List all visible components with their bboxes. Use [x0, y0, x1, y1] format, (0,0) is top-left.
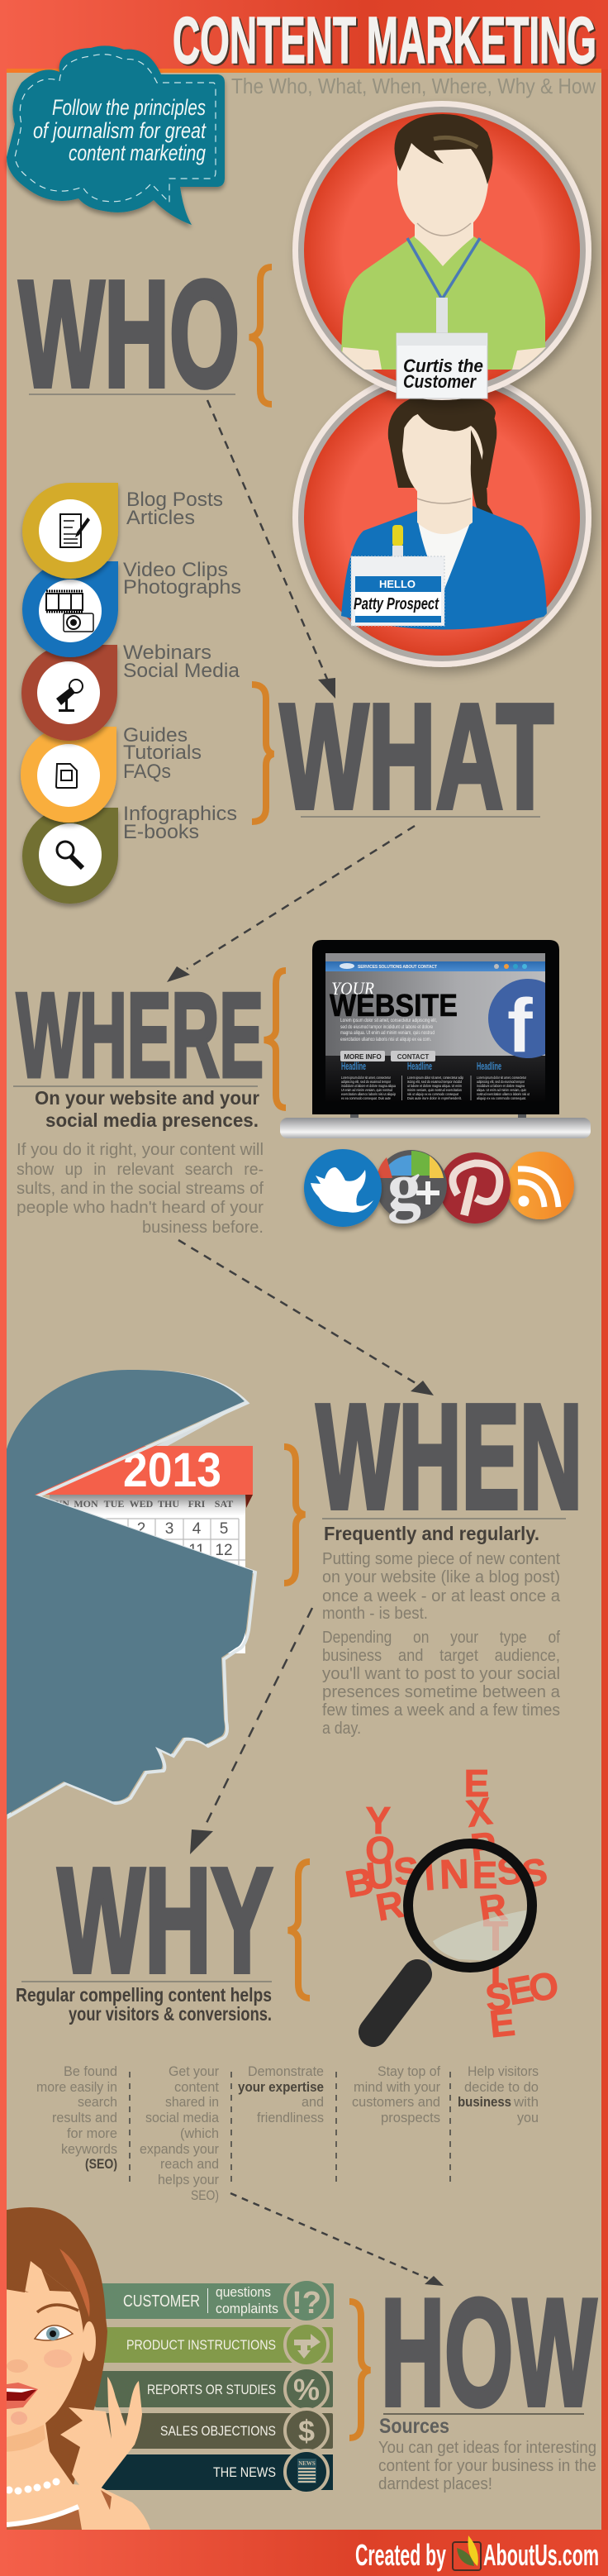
word: business: I	[423, 1855, 436, 1898]
word: business	[342, 1849, 550, 1906]
where body text: If you do it right, your content will	[17, 1141, 264, 1159]
where body text: sults, and in the social streams of	[17, 1180, 264, 1198]
footer band	[0, 2530, 608, 2576]
when body text: you'll want to post to your social	[322, 1665, 560, 1683]
calendar weekdays: FRI	[188, 1498, 206, 1510]
portrait: Curtis the Customer	[292, 101, 591, 400]
heading: WHERE: WHERE	[17, 968, 264, 1102]
when body text: Depending on your type of	[322, 1629, 560, 1647]
why subheading: your visitors & conversions.	[69, 2003, 272, 2025]
screen: website mockup: ut labore et dolore magna aliqua. Ut enim	[407, 1084, 462, 1088]
screen: website mockup: aliqua. Ut enim ad minim veniam, quis	[477, 1088, 527, 1092]
bar: the news: THE NEWS	[213, 2464, 276, 2480]
icon: newspaper: NEWS	[298, 2460, 316, 2467]
when body text: presences sometime between a	[322, 1683, 561, 1701]
screen: website mockup: Headline	[477, 1060, 501, 1072]
how body text: darndest places!	[378, 2475, 492, 2493]
list item: blog posts articles	[22, 483, 118, 579]
chest	[0, 2422, 150, 2530]
list labels: E-books	[123, 821, 199, 843]
where subheading	[35, 1087, 259, 1131]
column: be found: Be found	[64, 2063, 117, 2079]
footer credit: Created by	[355, 2538, 446, 2572]
hair highlight	[59, 2249, 90, 2317]
where subheading: social media presences.	[45, 1109, 259, 1131]
calendar year: 2013	[123, 1443, 221, 1497]
screen: website mockup: exercitation ullamco laboris nisi ut aliquip	[341, 1092, 396, 1096]
column: top of mind: prospects	[381, 2110, 440, 2125]
column: be found: keywords	[61, 2141, 117, 2157]
footer credit	[355, 2535, 599, 2572]
icon: magnifier	[57, 842, 83, 868]
why subheading: Regular compelling content helps	[16, 1984, 272, 2006]
right border	[601, 0, 608, 2576]
eye	[35, 2326, 73, 2340]
calendar	[35, 1399, 253, 1653]
column: social: reach and	[160, 2156, 219, 2172]
list labels: Blog Posts	[126, 489, 223, 511]
head silhouette	[7, 1370, 255, 1816]
where subheading: On your website and your	[35, 1087, 259, 1109]
why subheading	[16, 1984, 272, 2025]
word: expertise	[463, 1762, 517, 2045]
brace: WHAT	[252, 685, 273, 822]
word: your: Y	[366, 1799, 391, 1842]
mouth	[7, 2383, 38, 2409]
word: expertise: X	[463, 1789, 495, 1835]
bar: customer: complaints	[216, 2301, 278, 2316]
why columns	[36, 2063, 539, 2203]
laptop	[280, 940, 591, 1138]
hair	[0, 2207, 107, 2488]
when body text: on your website (like a blog post)	[322, 1568, 560, 1586]
speech bubble callout	[7, 45, 225, 225]
heading: WHO: WHO	[19, 249, 240, 418]
column: top of mind: Stay top of	[378, 2063, 440, 2079]
column: be found: search	[78, 2094, 117, 2110]
calendar weekdays: MON	[74, 1498, 98, 1510]
portrait: Patty Prospect	[292, 368, 591, 667]
word: expertise: E	[464, 1762, 489, 1805]
list labels: Video Clips	[123, 559, 228, 581]
column: do business: business	[458, 2094, 511, 2110]
column: do business: with	[513, 2094, 539, 2110]
calendar dates: 11	[188, 1542, 205, 1559]
calendar weekdays: SAT	[215, 1498, 233, 1510]
arrow: when to why	[190, 1608, 312, 1854]
calendar dates: 2	[137, 1520, 145, 1538]
hand	[60, 2377, 142, 2494]
icon: facebook: f	[507, 984, 533, 1068]
word: business: B	[342, 1859, 377, 1906]
screen: website mockup: sed do eiusmod tempor incididunt ut labore et dolore	[340, 1025, 434, 1030]
icon: direction arrows	[294, 2334, 321, 2359]
brace: HOW	[349, 2302, 370, 2438]
list labels: Tutorials	[123, 742, 202, 764]
list item: video clips photographs	[22, 561, 118, 657]
laptop base	[280, 1118, 591, 1138]
word: business: U	[364, 1852, 396, 1898]
word: expertise: T	[483, 1913, 508, 1959]
column: be found: results and	[52, 2110, 117, 2125]
word cloud under magnifier	[342, 1762, 562, 2045]
list item: webinars social media	[21, 645, 117, 741]
bar: customer: questions	[216, 2284, 271, 2300]
arrow: what to where	[167, 826, 415, 982]
word: business: S	[392, 1849, 421, 1893]
social icons	[304, 1148, 574, 1227]
icon: google plus: g	[387, 1148, 421, 1224]
screen: website mockup: MORE INFO	[344, 1053, 382, 1061]
heading: WHY: WHY	[58, 1838, 273, 2004]
column: be found: more easily in	[36, 2079, 117, 2095]
calendar weekdays: TUE	[104, 1498, 124, 1510]
where body text: business before.	[142, 1219, 264, 1237]
name badge: Patty Prospect: Patty Prospect	[354, 595, 439, 613]
column: expertise: and	[302, 2094, 324, 2110]
list labels: Social Media	[123, 660, 240, 682]
screen: website mockup: incididunt ut labore et dolore magna	[477, 1084, 525, 1088]
screen: website mockup: Lorem ipsum dolor sit amet, consectetur adipiscing elit,	[340, 1018, 437, 1023]
bubble text: of journalism for great	[33, 118, 207, 143]
word: your: O	[365, 1829, 395, 1872]
brace: WHY	[288, 1862, 310, 1998]
icon: facebook	[488, 979, 545, 1058]
screen: website mockup: nostrud exercitation ullamco laboris nisi ut	[477, 1092, 530, 1096]
column: be found: (SEO)	[85, 2156, 117, 2172]
how subheading: Sources	[379, 2415, 449, 2438]
icon: document and pen	[60, 514, 90, 547]
screen: website mockup: aliquip ex ea commodo consequat.	[477, 1096, 526, 1100]
column: social	[140, 2063, 220, 2203]
column: social: Get your	[169, 2063, 219, 2079]
list labels: Articles	[126, 507, 195, 529]
when subheading: Frequently and regularly.	[324, 1523, 539, 1544]
bar: product instructions	[99, 2323, 333, 2366]
screen: website mockup: adipiscing elit, sed do eiusmod tempor	[477, 1080, 525, 1084]
bar: product instructions: PRODUCT INSTRUCTIONS	[126, 2337, 276, 2353]
where body text: show up in relevant search re-	[17, 1161, 264, 1179]
word: business: N	[439, 1850, 470, 1898]
screen: website mockup	[325, 953, 545, 1100]
column: top of mind: customers and	[352, 2094, 440, 2110]
column: expertise: Demonstrate	[248, 2063, 324, 2079]
when body text: month - is best.	[322, 1605, 428, 1623]
name badge: Curtis: Customer	[403, 371, 477, 392]
column: be found: for more	[67, 2125, 117, 2141]
word: your: R	[373, 1882, 407, 1929]
screen: website mockup: adipiscing elit, sed do eiusmod tempor	[341, 1080, 391, 1084]
screen: website mockup: Headline	[341, 1060, 366, 1072]
when body text: a day.	[322, 1720, 361, 1738]
column: do business: Help visitors	[468, 2063, 539, 2079]
how body text	[378, 2439, 596, 2493]
source bars	[95, 2279, 334, 2493]
necklace	[5, 2478, 78, 2525]
calendar dates	[137, 1520, 233, 1559]
calendar dates: 4	[192, 1520, 202, 1538]
arrow: why to how	[230, 2193, 444, 2286]
screen: website mockup: magna aliqua. Ut enim ad minim veniam, quis nostrud	[340, 1031, 435, 1036]
screen: website mockup: CONTACT	[397, 1053, 429, 1061]
calendar dates: 3	[165, 1520, 173, 1538]
magnifying glass	[373, 1844, 532, 2032]
how body text: You can get ideas for interesting	[378, 2439, 596, 2457]
when body text: once a week - or at least once a	[322, 1587, 561, 1605]
column: expertise	[238, 2063, 324, 2125]
screen: website mockup: exercitation ullamco laboris nisi ut aliquip ex ea com.	[340, 1038, 431, 1042]
when body text: business and target audience,	[322, 1647, 560, 1665]
word: business: S	[519, 1849, 550, 1896]
bubble text	[33, 95, 207, 165]
screen: website mockup: minim veniam, quis nostrud exercitation	[407, 1088, 462, 1092]
word: seo: E	[504, 1967, 537, 2013]
calendar weekdays: THU	[158, 1498, 179, 1510]
brace: WHERE	[264, 971, 286, 1108]
icon: aboutus logo	[453, 2535, 481, 2570]
word: business: E	[473, 1853, 497, 1896]
icon: microphone	[56, 680, 83, 712]
face	[7, 2261, 84, 2423]
screen: website mockup: incididunt ut labore et dolore magna aliqua	[341, 1084, 396, 1088]
bar: the news	[100, 2450, 333, 2493]
icon: rss	[506, 1152, 574, 1219]
icon: newspaper	[297, 2459, 316, 2483]
column: social: social media	[145, 2110, 220, 2125]
word: expertise: S	[483, 1974, 513, 2019]
column: expertise: friendliness	[257, 2110, 324, 2125]
screen: website mockup: iscing elit, sed do eiusmod tempor incidid	[407, 1080, 462, 1084]
screen: website mockup: Lorem ipsum dolor sit amet, consectetur adip	[407, 1076, 463, 1080]
list labels	[123, 489, 241, 843]
column: social: (which	[180, 2125, 219, 2141]
screen: website mockup: WEBSITE	[330, 989, 458, 1023]
when body text	[322, 1550, 561, 1738]
name badge: Curtis: Curtis the	[403, 355, 483, 376]
ear	[83, 2321, 96, 2361]
column: do business	[458, 2063, 539, 2125]
bar: customer	[99, 2279, 334, 2322]
how body text: content for your business in the	[378, 2457, 596, 2475]
where body text	[17, 1141, 264, 1237]
calendar dates: 5	[220, 1520, 228, 1538]
calendar dates: 12	[215, 1542, 233, 1559]
screen: website mockup: Lorem ipsum dolor sit amet, consectetur	[341, 1076, 391, 1080]
arrow: where to when	[178, 1240, 434, 1395]
screen: website mockup: Lorem ipsum dolor sit amet, consectetur	[477, 1076, 526, 1080]
list labels: FAQs	[123, 761, 171, 783]
icon: google plus	[376, 1148, 447, 1224]
icon: twitter	[304, 1149, 382, 1227]
word: seo: O	[525, 1963, 562, 2011]
bar: sales objections	[95, 2409, 333, 2452]
word: expertise: P	[468, 1824, 498, 1868]
icon: film and camera	[46, 591, 93, 632]
column: expertise: your expertise	[238, 2079, 324, 2095]
word: seo	[504, 1963, 562, 2013]
bar: sales objections: SALES OBJECTIONS	[160, 2423, 276, 2439]
column: top of mind	[352, 2063, 440, 2125]
name badge: Patty Prospect: HELLO	[379, 578, 416, 590]
bar: reports or studies: REPORTS OR STUDIES	[147, 2382, 276, 2397]
word: business: S	[495, 1849, 525, 1893]
column: social: helps your	[158, 2172, 219, 2187]
bar: reports or studies	[95, 2368, 333, 2411]
name badge: Patty Prospect	[351, 556, 444, 626]
calendar weekdays: WED	[130, 1498, 154, 1510]
left border	[0, 0, 7, 2576]
nose	[7, 2359, 28, 2373]
eyebrow	[37, 2305, 78, 2312]
word: expertise: E	[487, 2001, 517, 2045]
screen: website mockup: Headline	[407, 1060, 432, 1072]
screen: website mockup: YOUR	[331, 978, 375, 999]
column: do business: you	[517, 2110, 539, 2125]
column: social: shared in	[165, 2094, 219, 2110]
when body text: few times a week and a few times	[322, 1701, 560, 1720]
arrow: who to what	[207, 400, 335, 699]
icon: exclamation question: !?	[292, 2286, 321, 2321]
brace: WHEN	[284, 1447, 305, 1583]
icon: pinterest	[439, 1152, 511, 1224]
column: social: expands your	[140, 2141, 219, 2157]
bubble text: Follow the principles	[52, 95, 206, 120]
name badge: Curtis	[397, 333, 487, 398]
word: your	[365, 1799, 407, 1929]
woman illustration	[0, 2207, 150, 2530]
column: social: content	[174, 2079, 219, 2095]
bubble text: content marketing	[69, 141, 206, 165]
list labels: Photographs	[123, 576, 241, 599]
bar: customer: CUSTOMER	[123, 2292, 200, 2311]
list labels: Infographics	[123, 803, 237, 825]
screen: website mockup: Ut enim ad minim veniam, quis nostrud	[341, 1088, 392, 1092]
word: expertise: I	[491, 1952, 501, 1995]
when body text: Putting some piece of new content	[322, 1550, 560, 1568]
calendar weekdays: SUN	[50, 1498, 69, 1510]
screen: website mockup: Duis aute irure dolor in reprehenderit.	[407, 1096, 462, 1100]
list labels: Guides	[123, 724, 188, 747]
brace: WHO	[249, 267, 272, 404]
word: expertise: R	[477, 1885, 510, 1931]
where body text: people who hadn't heard of your	[17, 1199, 264, 1217]
calendar weekdays	[50, 1498, 233, 1510]
column: social: SEO)	[191, 2187, 219, 2203]
icon: document card	[56, 764, 77, 788]
column: top of mind: mind with your	[354, 2079, 440, 2095]
header band	[0, 0, 608, 73]
list item: guides tutorials faqs	[21, 727, 116, 823]
list labels: Webinars	[123, 642, 211, 664]
cheek	[44, 2349, 72, 2368]
column: be found	[36, 2063, 117, 2172]
icon: dollar: $	[298, 2414, 315, 2448]
screen: website mockup: SERVICES SOLUTIONS ABOUT CONTACT	[358, 965, 437, 970]
list item: infographics e-books	[22, 808, 118, 904]
column: do business: decide to do	[464, 2079, 539, 2095]
icon: percent: %	[293, 2373, 320, 2407]
screen: website mockup: ex ea commodo consequat. Duis aute	[341, 1096, 391, 1100]
screen: website mockup: nisi ut aliquip ex ea commodo consequat	[407, 1092, 459, 1096]
